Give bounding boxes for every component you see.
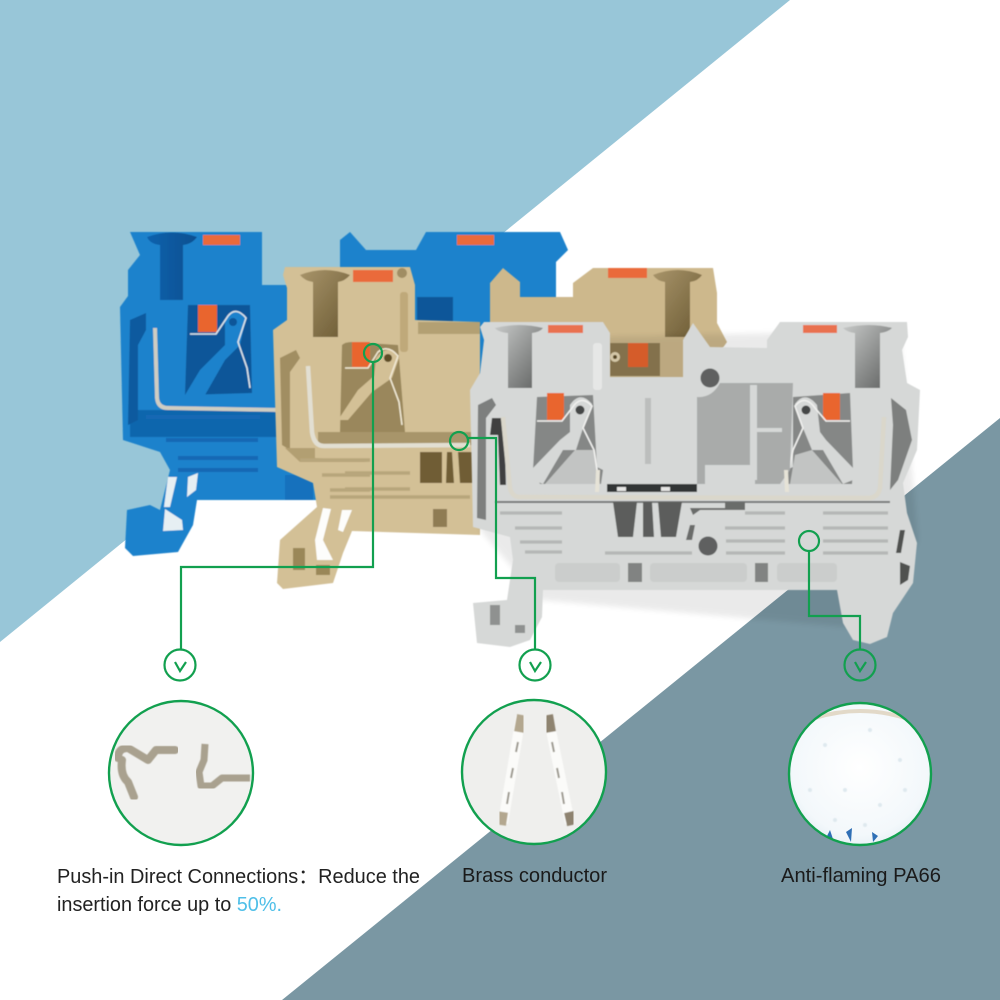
caption: push-in connections: insertion force up to 50%. [57, 894, 282, 916]
beige dark slots [420, 452, 478, 483]
grey upper hole [700, 368, 720, 388]
blue slot [147, 232, 197, 300]
beige spring window [340, 342, 405, 432]
beige cavity [318, 432, 473, 445]
beige front terminal block [273, 267, 480, 589]
beige lever [338, 350, 399, 420]
grey left slot [495, 325, 543, 388]
grey right slot [843, 325, 892, 388]
grey centre vertical mark [645, 398, 651, 464]
blue foot openings [163, 473, 198, 531]
chevron marker 1 [164, 650, 196, 680]
spring clip right [199, 744, 250, 786]
grey left spring window [533, 395, 603, 484]
blue terminal block [120, 232, 568, 556]
grey dark centre slots [613, 502, 682, 537]
pellet texture [808, 728, 907, 827]
background: light blue diagonal [0, 0, 790, 642]
grey grooves [500, 513, 888, 553]
grey right orange tab [803, 325, 837, 333]
caption: push-in connections: Push-in Direct Connections：Reduce the [57, 866, 420, 888]
thumbnail: PA66 pellets [785, 700, 935, 850]
blue spring window [185, 305, 252, 395]
spring clip left [118, 748, 175, 797]
blue orange actuator [198, 305, 217, 332]
leader line: brass conductor callout [450, 432, 535, 650]
blue lower cavity [130, 410, 280, 437]
beige rear terminal block [490, 268, 727, 380]
beige foot openings [315, 508, 352, 560]
beige square notch [433, 509, 447, 527]
background: slate diagonal [282, 418, 1000, 1000]
chevron marker 3 [844, 650, 876, 680]
grey right dark openings [896, 530, 910, 585]
blue orange tab [203, 235, 240, 245]
grey block shadow [480, 330, 918, 630]
beige slot [300, 270, 350, 337]
blue lever [185, 312, 246, 395]
blue second orange tab [457, 235, 494, 245]
beige side slot [400, 292, 408, 352]
thumbnail: brass conductors [462, 700, 606, 844]
grey left orange tab [548, 325, 583, 333]
grey right actuator [823, 393, 840, 420]
grey centre compartment [697, 383, 793, 484]
grey right lever [795, 397, 853, 484]
grey left lever [533, 397, 592, 484]
beige rear slot [653, 270, 702, 337]
beige rear orange tab [608, 268, 647, 278]
beige dark side channel [280, 350, 300, 450]
caption: anti-flaming PA66: Anti-flaming PA66 [781, 865, 941, 887]
grey lower hole [698, 536, 718, 556]
grey dark side channels [477, 398, 496, 520]
grey side slot [593, 343, 602, 390]
grey contact band [607, 484, 697, 492]
grey right spring window [786, 393, 853, 484]
blue grooves [146, 417, 260, 470]
beige rear window [610, 343, 660, 376]
blue window right [417, 297, 453, 325]
caption: push-in connections [57, 866, 420, 916]
caption: brass conductor: Brass conductor [462, 865, 607, 887]
thumbnail: spring clips [109, 701, 253, 845]
conductor strip left [501, 715, 522, 825]
grey left actuator [547, 393, 564, 420]
grey front terminal block [470, 322, 920, 647]
grey connector tabs [595, 470, 789, 492]
beige orange tab [353, 270, 393, 282]
conductor strip right [548, 715, 572, 825]
grey conductor bar [503, 417, 884, 498]
beige rear actuator [628, 343, 648, 367]
grey foot notches [490, 605, 525, 633]
leader line: PA66 callout [799, 531, 860, 649]
beige grooves [300, 460, 470, 497]
beige orange actuator [352, 342, 370, 367]
leader line: spring clip callout [181, 344, 382, 649]
blue conductor [155, 328, 280, 410]
chevron marker 2 [520, 650, 550, 680]
beige conductor [308, 366, 470, 446]
grey lower recesses [555, 563, 620, 582]
blue specks [826, 828, 878, 842]
